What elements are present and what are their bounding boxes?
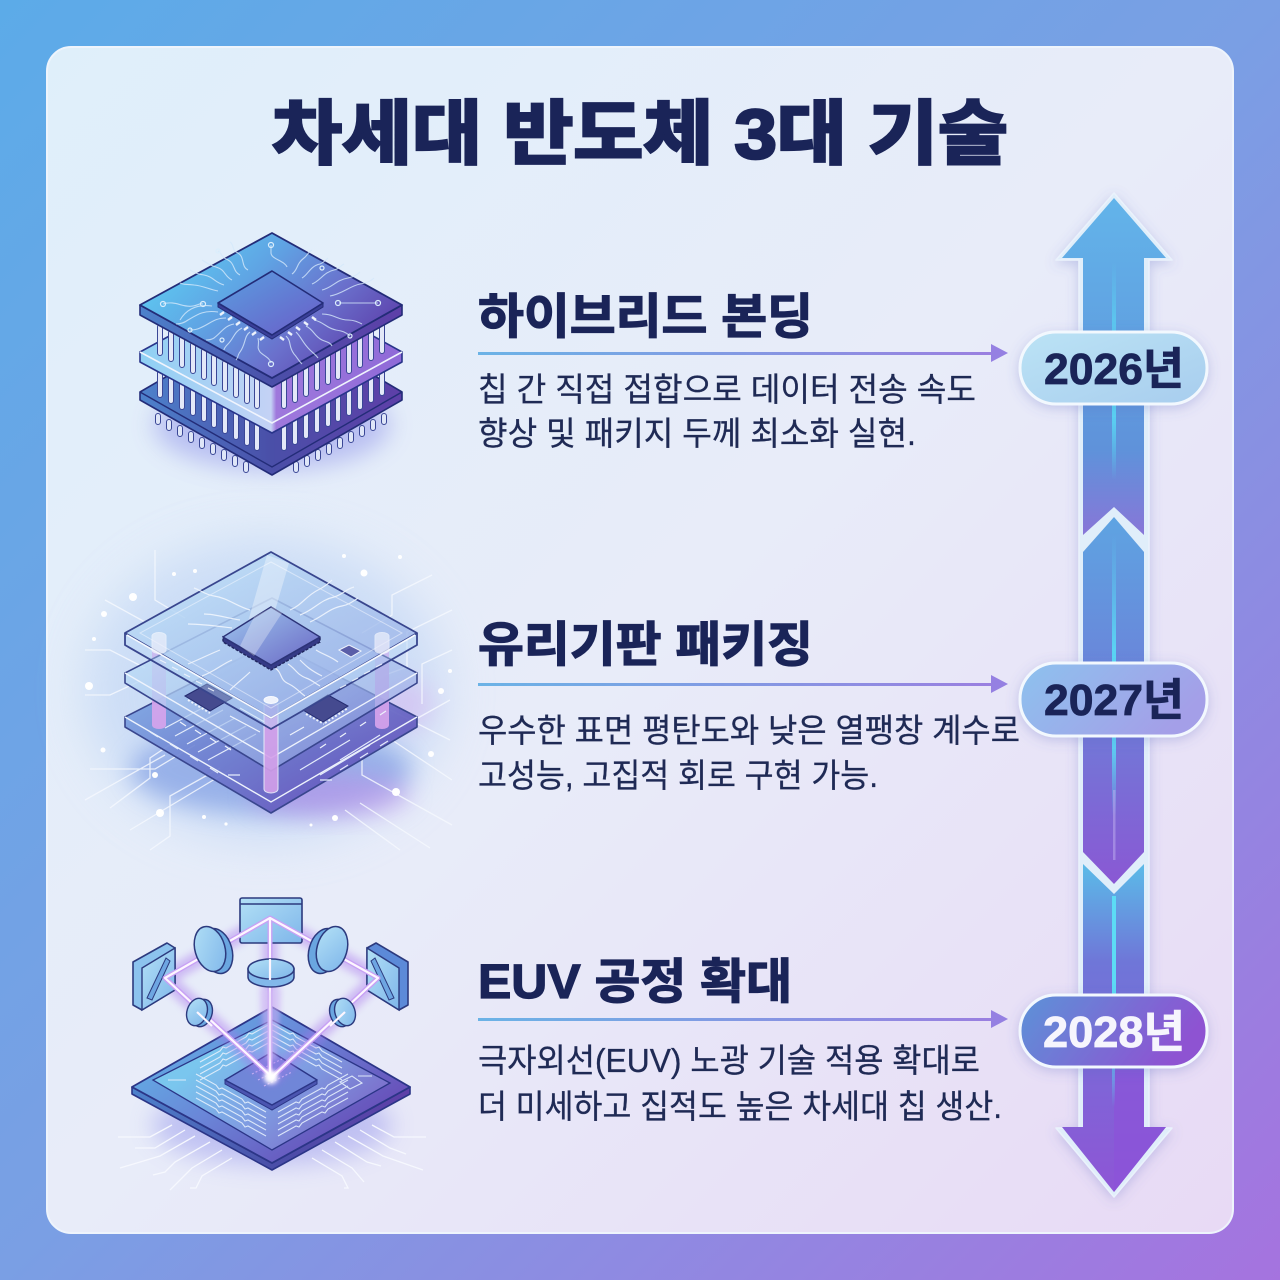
icon: EUV optics over wafer <box>118 898 426 1190</box>
glass chip <box>223 607 320 670</box>
arrow: hybrid bonding connector <box>478 344 1008 362</box>
text: EUV description: 극자외선(EUV) 노광 기술 적용 확대로 <box>478 1042 980 1079</box>
text: hybrid bonding description: 향상 및 패키지 두께 최소화 실현. <box>478 415 916 452</box>
circuit lines <box>85 550 452 850</box>
text: EUV description: 더 미세하고 집적도 높은 차세대 칩 생산. <box>478 1088 1002 1125</box>
center die <box>218 271 323 340</box>
right mirror <box>367 943 408 1010</box>
icon: hybrid bonding chip stack <box>140 233 402 475</box>
focus point <box>264 1070 278 1084</box>
arrow: EUV connector <box>478 1010 1008 1028</box>
arrow: glass substrate connector <box>478 675 1008 693</box>
text: glass substrate description: 고성능, 고집적 회로 구현 가능. <box>478 757 878 794</box>
center lens <box>248 959 294 987</box>
year badge 2027: 2027년 <box>1044 676 1184 725</box>
year badge 2026: 2026년 <box>1044 345 1184 394</box>
icon: glass substrate package <box>85 540 452 850</box>
left mirror <box>133 943 175 1010</box>
year badge 2028: 2028년 <box>1043 1008 1185 1057</box>
text: hybrid bonding description <box>478 371 976 452</box>
wafer traces <box>168 1024 372 1136</box>
exposure beam shimmer <box>260 990 282 1060</box>
heading: hybrid bonding: 하이브리드 본딩 <box>478 291 813 344</box>
glowing particles <box>85 554 452 826</box>
title: 차세대 반도체 3대 기술 <box>272 95 1008 173</box>
top mirror <box>240 898 302 943</box>
text: EUV description <box>478 1042 1002 1125</box>
year badge 2027 <box>1020 663 1207 736</box>
text: hybrid bonding description: 칩 간 직접 접합으로 데이터 전송 속도 <box>478 371 976 408</box>
text: glass substrate description: 우수한 표면 평탄도와 낮은 열팽창 계수로 <box>478 712 1020 749</box>
laser glow <box>165 918 378 1077</box>
circuit traces <box>163 242 378 364</box>
circuit legs <box>118 1125 426 1190</box>
center die <box>225 1052 317 1110</box>
heading: EUV process expansion: EUV 공정 확대 <box>478 956 792 1009</box>
upper lenses <box>189 923 353 977</box>
lower lenses <box>183 996 359 1029</box>
text: glass substrate description <box>478 712 1020 794</box>
laser beams <box>165 918 378 1077</box>
heading: glass substrate packaging: 유리기판 패키징 <box>478 619 813 672</box>
timeline double arrow <box>1056 193 1172 1197</box>
year badge 2028 <box>1020 995 1207 1067</box>
year badge 2026 <box>1020 332 1207 404</box>
